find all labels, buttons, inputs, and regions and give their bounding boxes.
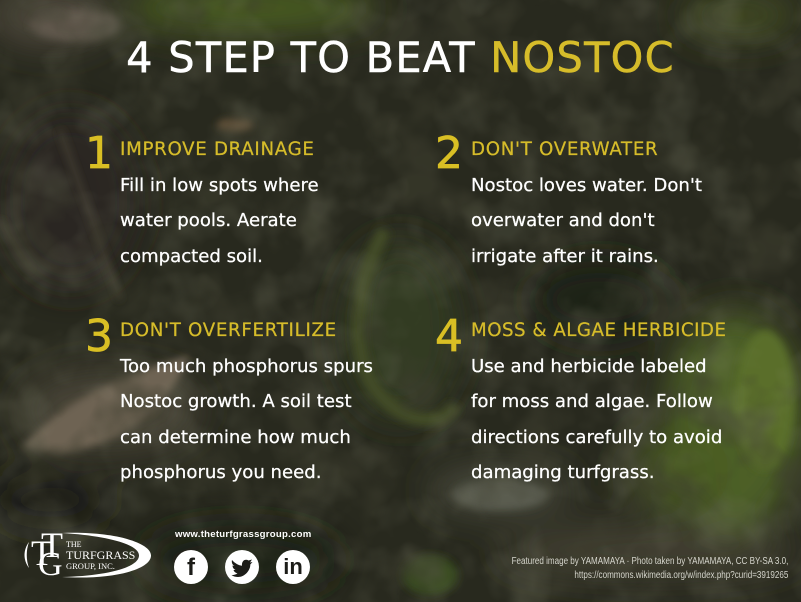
logo: The Turfgrass Group, Inc.: THE [66,540,82,549]
heading: improve drainage: IMPROVE DRAINAGE [120,139,315,160]
icon: twitter [225,550,259,584]
logo: The Turfgrass Group, Inc.: T [31,533,53,573]
step 2 [435,128,702,267]
image credit: https://commons.wikimedia.org/w/index.php?curid=3919265 [574,570,788,581]
body text [120,356,373,483]
heading: moss & algae herbicide: MOSS & ALGAE HERBICIDE [471,320,726,341]
image credit [511,556,788,581]
step 3 [85,311,373,483]
website url: www.theturfgrassgroup.com [175,529,312,540]
number 3: 3 [85,311,113,362]
heading: don't overfertilize: DON'T OVERFERTILIZE [120,320,337,341]
body text: for moss and algae. Follow [471,391,713,412]
body text [471,356,722,483]
body text: Use and herbicide labeled [471,356,707,377]
body text: damaging turfgrass. [471,462,654,483]
logo: The Turfgrass Group, Inc.: GROUP, INC. [66,561,115,571]
icon: facebook: f [187,554,195,581]
body text: Nostoc loves water. Don't [471,175,702,196]
body text: can determine how much [120,427,351,448]
body text: Fill in low spots where [120,175,319,196]
logo: The Turfgrass Group, Inc.: TURFGRASS [66,548,135,562]
icon: linkedin [276,550,310,584]
body text [120,175,319,267]
body text: Nostoc growth. A soil test [120,391,352,412]
step 1 [85,128,319,267]
body text: compacted soil. [120,246,263,267]
body text: phosphorus you need. [120,462,322,483]
body text: directions carefully to avoid [471,427,722,448]
title: 4 STEP TO BEAT NOSTOC [126,33,675,82]
number 2: 2 [435,128,463,179]
body text [471,175,702,267]
image credit: Featured image by YAMAMAYA · Photo taken by YAMAMAYA, CC BY-SA 3.0, [511,556,788,567]
body text: overwater and don't [471,210,655,231]
body text: Too much phosphorus spurs [120,356,373,377]
logo: The Turfgrass Group, Inc. [24,528,151,580]
icon: linkedin: in [283,554,303,579]
step 4 [435,311,726,483]
number 4: 4 [435,311,463,362]
number 1: 1 [85,128,113,179]
body text: irrigate after it rains. [471,246,659,267]
icon: facebook [174,550,208,584]
body text: water pools. Aerate [120,210,297,231]
heading: don't overwater: DON'T OVERWATER [471,139,658,160]
